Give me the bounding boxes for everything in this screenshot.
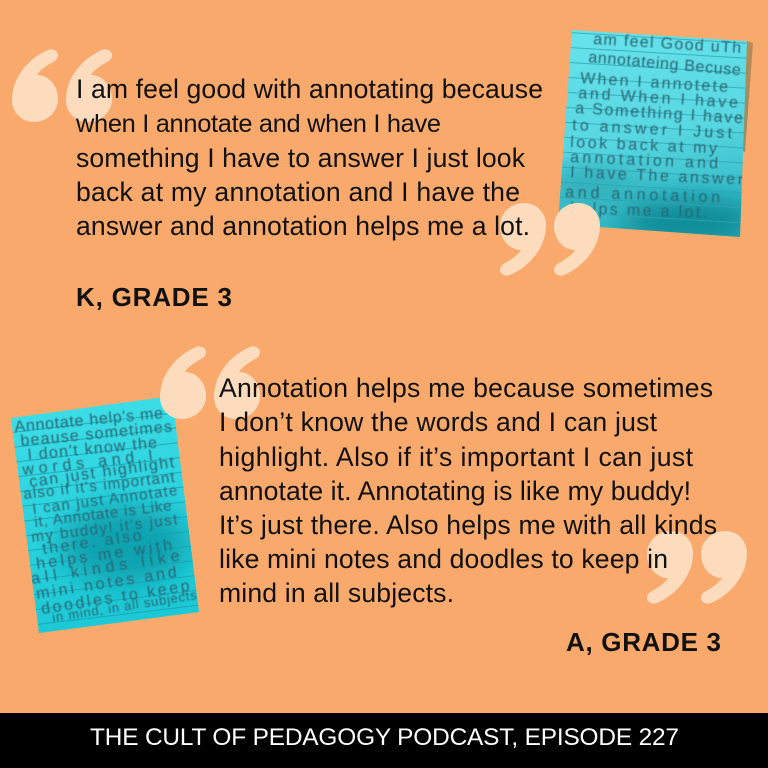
- handwritten note: K, grade 3: [558, 30, 753, 237]
- handwritten note: A, grade 3: words and I: [21, 447, 154, 479]
- handwritten note: A, grade 3: it, Annotate is Like: [33, 497, 172, 531]
- text block: K's quote: when I annotate and when I have: [75, 110, 441, 138]
- handwritten note: A, grade 3: [0, 396, 200, 633]
- handwritten note: K, grade 3: and When I have: [578, 85, 739, 112]
- icon: opening quotation mark, bottom: [160, 346, 260, 419]
- text block: A's quote: annotate it. Annotating is like my buddy!: [219, 476, 691, 506]
- text block: A's quote: Annotation helps me because sometimes: [219, 373, 713, 403]
- icon: closing quotation mark, bottom: [647, 531, 747, 604]
- footer banner: THE CULT OF PEDAGOGY PODCAST, EPISODE 227: [90, 724, 679, 751]
- text block: K's quote: back at my annotation and I have the: [76, 177, 520, 207]
- text block: A's quote: I don’t know the words and I can just: [219, 407, 658, 437]
- handwritten note: A, grade 3: I don't know the: [27, 435, 158, 464]
- handwritten note: K, grade 3: look back at my: [570, 134, 717, 157]
- text block: K's quote: I am feel good with annotating because: [76, 74, 543, 104]
- handwritten note: K, grade 3: to answer I Just: [572, 117, 733, 142]
- handwritten note: A, grade 3: Annotate help's me: [14, 405, 164, 436]
- handwritten note: A, grade 3: beause sometimes: [20, 418, 173, 450]
- handwritten note: K, grade 3: a Something I have: [575, 100, 744, 127]
- handwritten note: A, grade 3: can just highlight: [28, 454, 176, 491]
- text block: A's quote: highlight. Also if it’s important I can just: [219, 442, 694, 472]
- handwritten note: K, grade 3: annotateing Becuse: [588, 49, 742, 79]
- handwritten note: K, grade 3: I have The answer: [570, 164, 744, 189]
- handwritten note: A, grade 3: all kinds like: [30, 548, 181, 588]
- attribution: K, Grade 3: K, GRADE 3: [76, 282, 232, 312]
- handwritten note: A, grade 3: my buddy! it's just: [30, 511, 179, 546]
- text block: K's quote: something I have to answer I just look: [76, 143, 526, 173]
- text block: A's quote: [219, 373, 717, 608]
- handwritten note: A, grade 3: doodles to keep: [40, 578, 191, 618]
- handwritten note: K, grade 3: annotation and: [570, 149, 718, 172]
- handwritten note: A, grade 3: I can just Annotate: [31, 482, 178, 518]
- handwritten note: K, grade 3: helps me a lot.: [570, 200, 707, 222]
- handwritten note: A, grade 3: helps me with: [35, 537, 173, 573]
- text block: A's quote: It’s just there. Also helps me with all kinds: [219, 510, 717, 540]
- handwritten note: A, grade 3: there. also: [41, 527, 143, 558]
- text block: A's quote: mind in all subjects.: [219, 578, 454, 608]
- handwritten note: K, grade 3: When I annotete: [580, 70, 729, 96]
- text block: K's quote: [75, 74, 543, 241]
- handwritten note: K, grade 3: and annotation: [565, 184, 720, 206]
- footer banner: [0, 713, 768, 768]
- text block: K's quote: answer and annotation helps me a lot.: [76, 211, 530, 241]
- handwritten note: A, grade 3: in mind, in all subjects: [51, 587, 198, 625]
- icon: opening quotation mark, top: [12, 49, 112, 122]
- text block: A's quote: like mini notes and doodles to keep in: [219, 544, 668, 574]
- handwritten note: A, grade 3: mini notes and: [35, 564, 178, 603]
- icon: closing quotation mark, top: [500, 203, 600, 276]
- handwritten note: K, grade 3: am feel Good uTh: [593, 31, 742, 57]
- handwritten note: A, grade 3: also if it's important: [23, 469, 176, 503]
- attribution: A, Grade 3: A, GRADE 3: [566, 627, 721, 657]
